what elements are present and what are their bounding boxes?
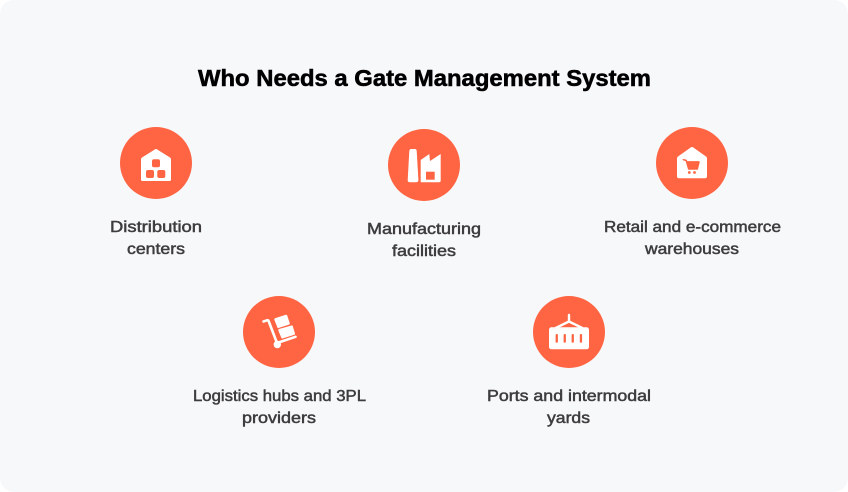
- label: Manufacturing: [367, 221, 481, 238]
- label: Logistics hubs and 3PL: [193, 388, 366, 405]
- item: ports and intermodal yards: [487, 296, 651, 427]
- item: retail and e-commerce warehouses: [604, 127, 781, 258]
- item: manufacturing facilities: [367, 129, 481, 260]
- label: [110, 219, 202, 258]
- label: centers: [127, 241, 185, 258]
- icon: factory: [388, 129, 460, 201]
- icon: hand truck: [243, 296, 315, 368]
- label: [487, 388, 651, 427]
- title: Who Needs a Gate Management System: [198, 65, 651, 91]
- label: Ports and intermodal: [487, 388, 651, 405]
- icon: warehouse with cart: [656, 127, 728, 199]
- label: Distribution: [110, 219, 202, 236]
- label: yards: [547, 410, 590, 427]
- item: distribution centers: [110, 127, 202, 258]
- icon: shipping container on crane: [533, 296, 605, 368]
- label: facilities: [392, 243, 456, 260]
- label: Retail and e-commerce: [604, 219, 781, 236]
- label: [604, 219, 781, 258]
- label: [367, 221, 481, 260]
- icon: warehouse with boxes: [120, 127, 192, 199]
- label: providers: [242, 410, 316, 427]
- label: warehouses: [644, 241, 739, 258]
- label: [193, 388, 366, 427]
- item: logistics hubs and 3PL providers: [193, 296, 366, 427]
